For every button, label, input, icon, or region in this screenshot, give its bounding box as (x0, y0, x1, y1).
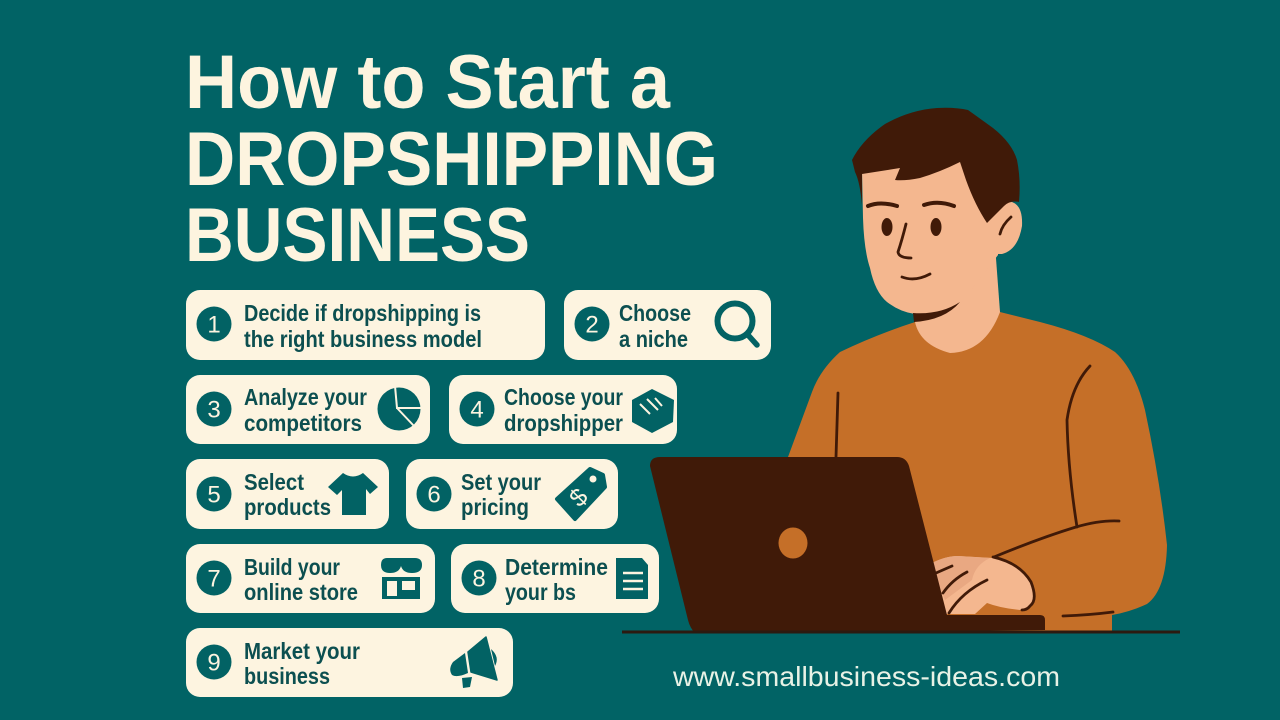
panel: step 2: Choose (619, 300, 691, 326)
laptop (650, 457, 1045, 633)
panel: step 5: products (244, 494, 331, 520)
sweater (788, 312, 1167, 632)
panel: step 2 (564, 290, 771, 360)
hair (852, 108, 1020, 223)
icon: storefront (381, 558, 422, 599)
panel: step 8: 8 (472, 566, 486, 592)
face (862, 150, 998, 314)
panel: step 1 (186, 290, 545, 360)
title: DROPSHIPPING (185, 117, 718, 202)
panel: step 4: dropshipper (504, 410, 623, 436)
panel: step 9: 9 (207, 650, 221, 676)
panel: step 1: Decide if dropshipping is (244, 300, 481, 326)
laptop logo (778, 528, 808, 558)
title: How to Start a (185, 40, 671, 125)
ear (990, 202, 1022, 254)
panel: step 3: Analyze your (244, 384, 367, 410)
panel: step 4: Choose your (504, 384, 623, 410)
icon: document (616, 558, 648, 599)
chin shadow (913, 302, 960, 322)
panel: step 7: online store (244, 579, 358, 605)
panel: step 6: pricing (461, 494, 529, 520)
panel: step 4 (449, 375, 677, 444)
panel: step 7 (186, 544, 435, 613)
panel: step 8: your bs (505, 579, 576, 605)
panel: step 5: Select (244, 469, 304, 495)
panel: step 1: the right business model (244, 326, 482, 352)
panel: step 3: competitors (244, 410, 362, 436)
illustration: man working at laptop (622, 108, 1180, 634)
sweater fold lines (836, 366, 1119, 616)
panel: step 9: Market your (244, 638, 360, 664)
facial features (868, 203, 1011, 279)
panel: step 6: Set your (461, 469, 541, 495)
icon: t-shirt (328, 473, 378, 515)
icon: magnifying glass (718, 304, 757, 345)
panel: step 6 (406, 459, 618, 529)
title (185, 40, 718, 278)
icon: pie chart (378, 386, 421, 430)
panel: step 2: a niche (619, 326, 688, 352)
icon: package box (632, 389, 674, 433)
panel: step 8: Determine (505, 554, 608, 580)
panel: step 4: 4 (470, 396, 484, 424)
desk line (622, 630, 1180, 634)
title: BUSINESS (185, 193, 530, 278)
panel: step 1: 1 (207, 312, 221, 338)
panel: step 7: 7 (207, 566, 221, 592)
panel: step 9: business (244, 663, 330, 689)
panel: step 5: 5 (207, 482, 221, 508)
icon: megaphone (450, 637, 497, 688)
panel: step 2: 2 (585, 312, 599, 338)
panel: step 8 (451, 544, 659, 613)
panel: step 3: 3 (207, 396, 221, 424)
icon: price tag: $ (564, 483, 594, 513)
panel: step 5 (186, 459, 389, 529)
hand (930, 556, 1034, 614)
panel: step 6: 6 (427, 482, 441, 508)
icon: price tag (557, 469, 605, 519)
panel: step 9 (186, 628, 513, 697)
panel: step 3 (186, 375, 430, 444)
website url: www.smallbusiness-ideas.com (672, 661, 1060, 692)
neck (915, 245, 1000, 353)
panel: step 7: Build your (244, 554, 340, 580)
